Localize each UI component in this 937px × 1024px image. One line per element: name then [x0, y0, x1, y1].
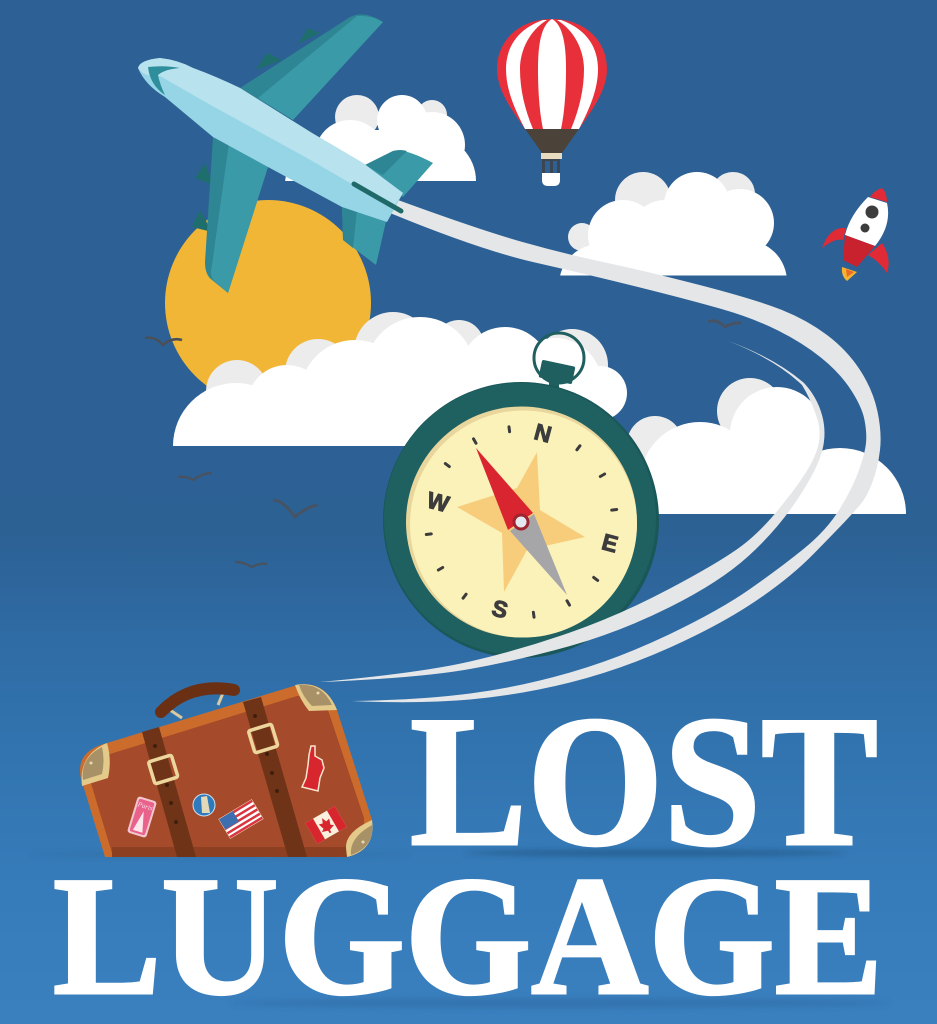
rocket window	[866, 206, 878, 218]
lower tail fin	[342, 207, 387, 265]
ground shadow under suitcase	[30, 852, 410, 856]
rocket lower section	[843, 235, 875, 267]
compass letter E: E	[599, 528, 621, 558]
rocket body	[845, 197, 888, 246]
vapor trail inner	[320, 341, 824, 682]
engine pods	[192, 28, 320, 232]
large cloud right	[628, 378, 906, 514]
buckle right	[248, 724, 278, 753]
lower wing	[205, 137, 268, 293]
rocket left fin	[822, 228, 846, 248]
balloon basket	[542, 173, 560, 186]
bird	[235, 562, 267, 567]
sticker Canada flag	[305, 806, 347, 844]
sun	[165, 200, 371, 406]
balloon envelope	[497, 19, 607, 129]
airplane	[138, 14, 433, 293]
cloud upper right	[560, 172, 786, 276]
suitcase base shade	[112, 847, 348, 857]
title line LOST: LOST	[410, 678, 878, 885]
needle hub	[512, 514, 530, 530]
bird	[178, 473, 212, 480]
vapor trail outer	[352, 200, 881, 702]
corner top left	[82, 743, 110, 786]
upper tail fin	[365, 150, 433, 197]
bird	[145, 338, 182, 345]
bottom shadow	[230, 998, 890, 1008]
sticker Paris: Paris	[136, 800, 154, 813]
upper wing	[240, 14, 383, 120]
sticker Statue of Liberty	[302, 746, 324, 791]
rocket right fin	[868, 243, 889, 273]
tail stripe	[354, 184, 401, 211]
compass dial	[406, 406, 637, 638]
rocket flame	[842, 267, 857, 281]
large cloud left	[173, 312, 627, 446]
ground shadow under title	[465, 850, 845, 856]
corner bottom right	[346, 820, 372, 857]
suitcase	[80, 684, 372, 857]
sticker USA flag	[219, 800, 263, 838]
balloon band	[541, 153, 562, 159]
bird	[708, 321, 742, 327]
strap left	[142, 727, 196, 857]
compass rim	[383, 382, 659, 658]
suitcase handle	[161, 688, 234, 718]
compass star	[457, 452, 585, 592]
corner top right	[295, 684, 337, 711]
compass handle ring	[534, 333, 584, 383]
strap right	[243, 697, 307, 857]
buckle left	[148, 755, 178, 784]
suitcase front panel	[90, 696, 364, 853]
suitcase shell	[80, 684, 372, 857]
balloon skirt	[525, 129, 579, 153]
compass	[383, 333, 659, 658]
balloon white stripes	[506, 19, 598, 129]
rocket	[822, 188, 889, 281]
hot air balloon	[497, 19, 607, 186]
needle south	[510, 514, 567, 595]
dial ticks	[426, 427, 617, 617]
fuselage	[138, 58, 403, 222]
rocket nose	[870, 188, 887, 202]
rocket window	[860, 224, 870, 232]
needle north	[476, 448, 533, 530]
sticker Paris	[127, 796, 157, 838]
cockpit window	[148, 66, 180, 95]
compass letter N: N	[532, 418, 554, 448]
bird	[273, 500, 318, 517]
compass letter S: S	[489, 594, 511, 624]
sticker globe	[193, 794, 215, 816]
balloon ropes	[542, 159, 560, 173]
title	[53, 678, 883, 1024]
compass letter W: W	[424, 487, 452, 517]
cloud behind plane	[285, 95, 476, 181]
compass lug	[539, 360, 575, 388]
